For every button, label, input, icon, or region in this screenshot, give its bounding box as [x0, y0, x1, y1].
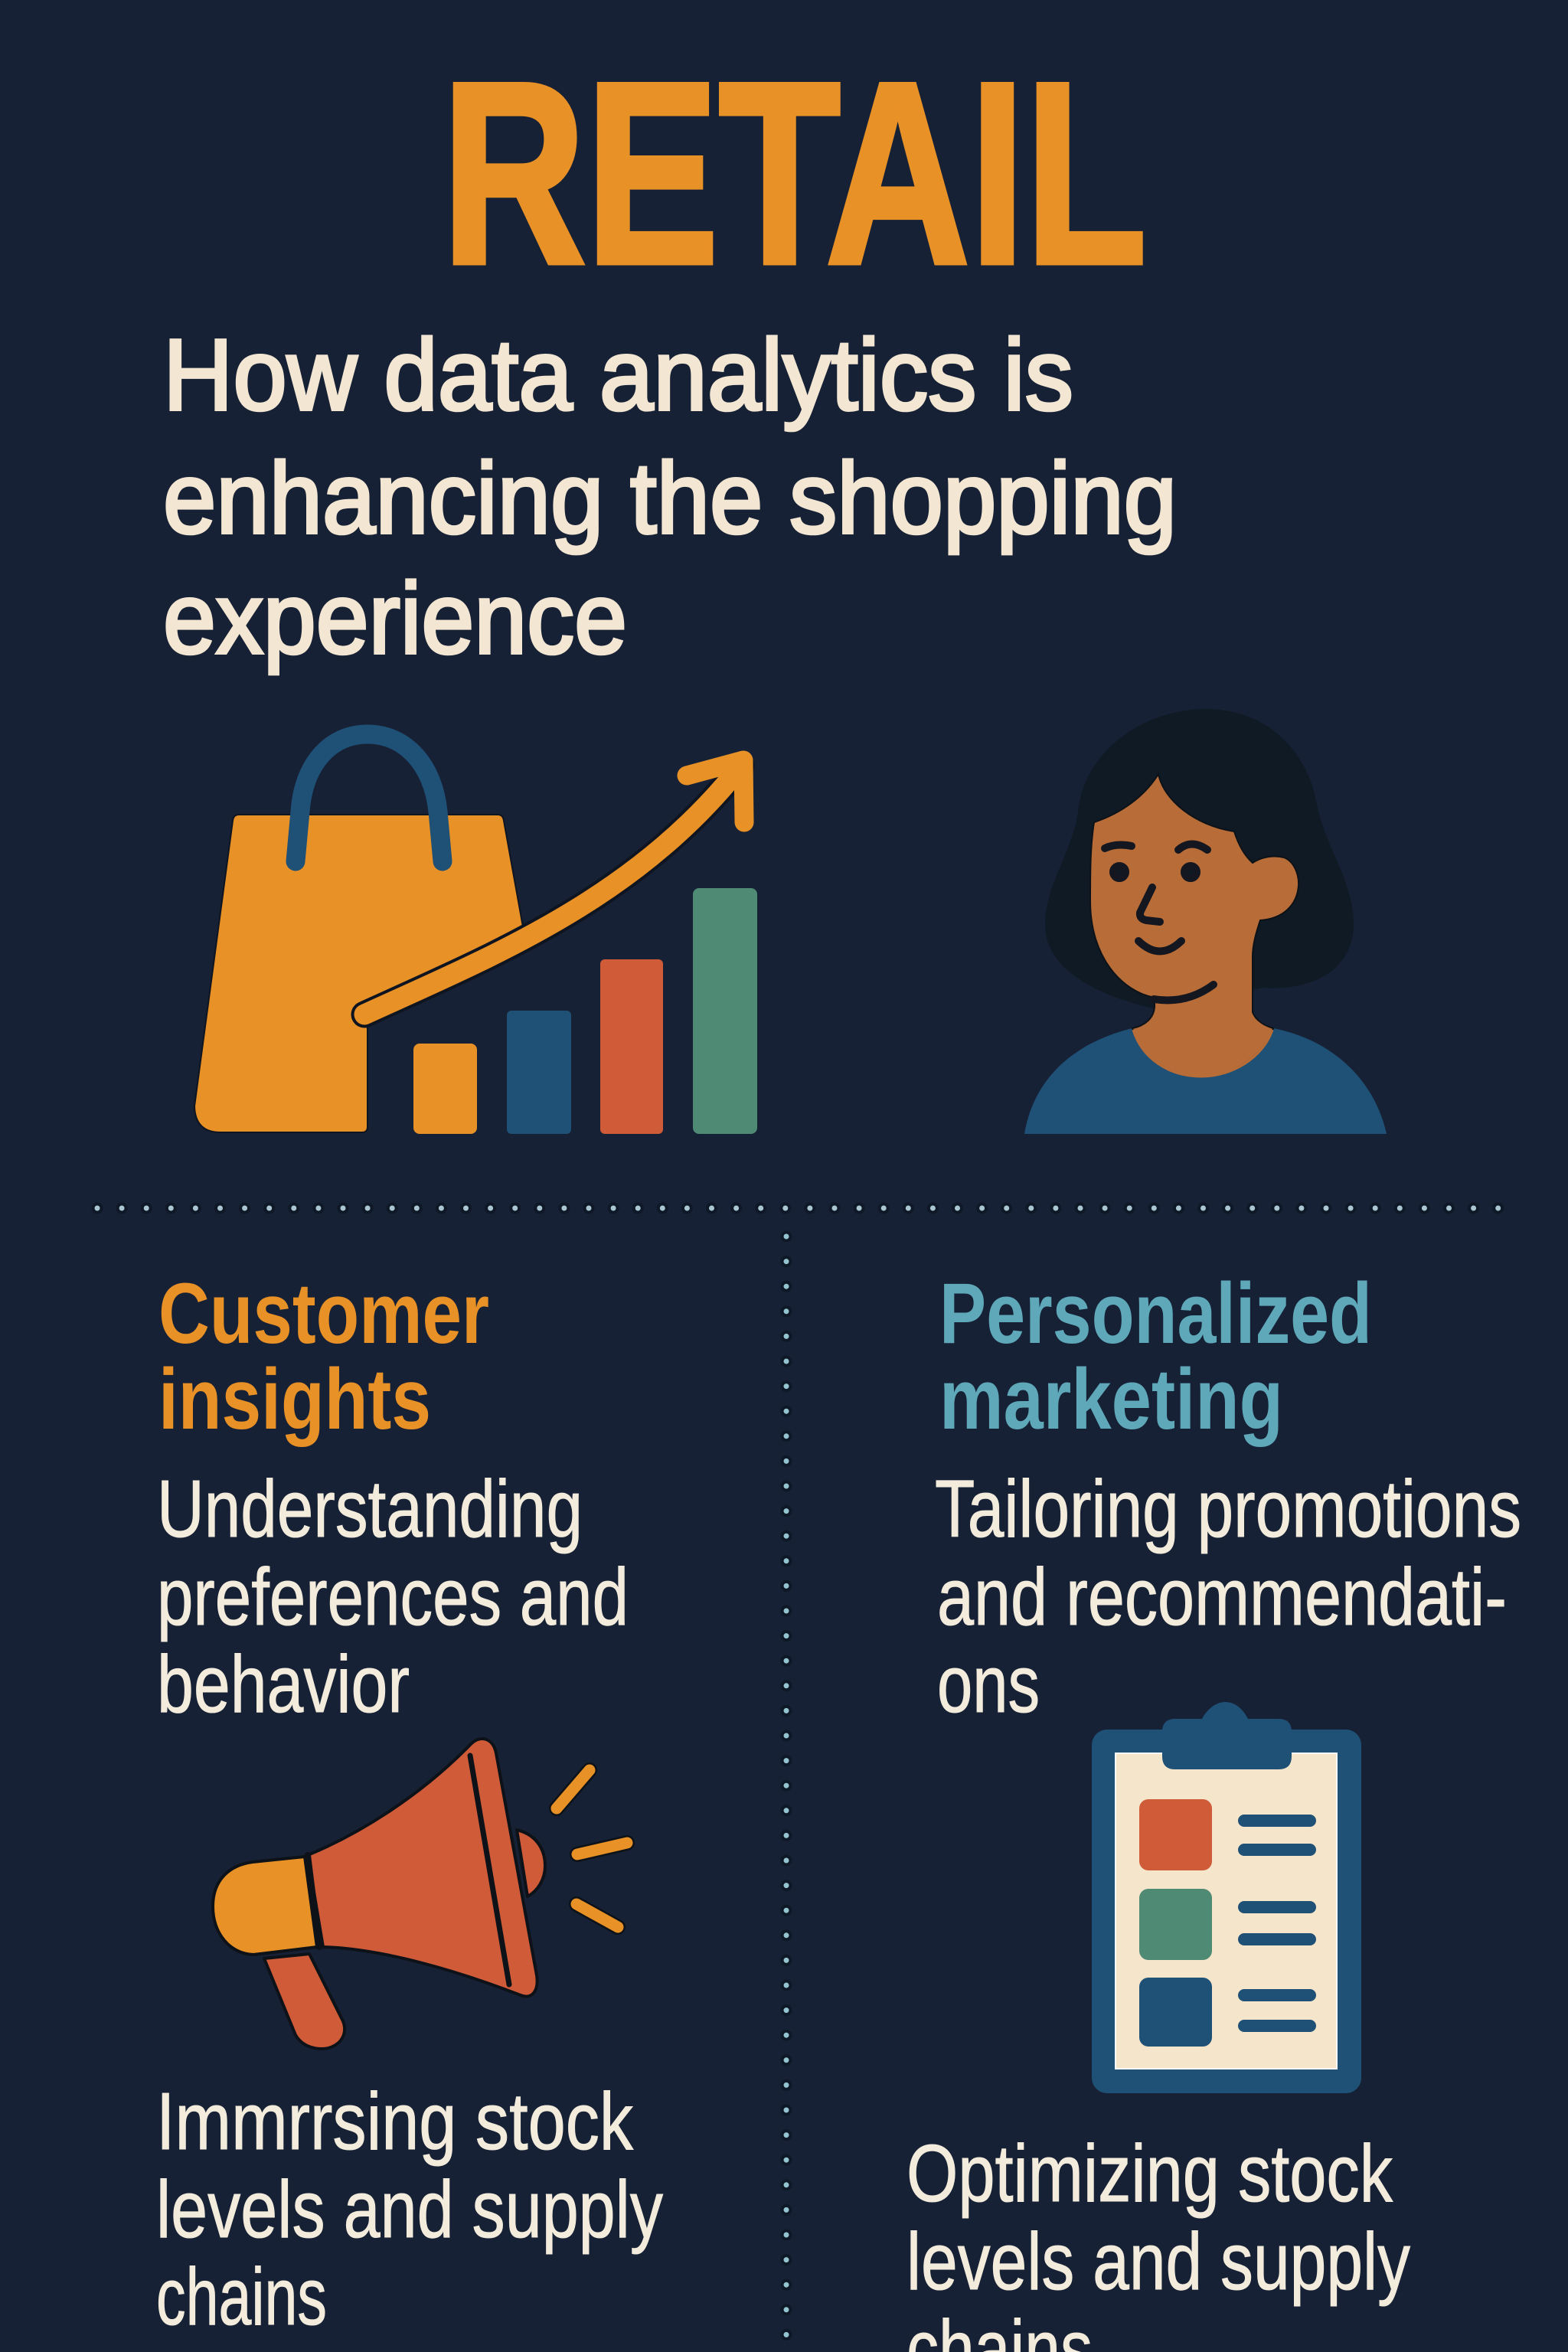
hair	[1045, 709, 1354, 1009]
heading: customer insights: insights	[158, 1351, 431, 1447]
megaphone cone	[308, 1739, 537, 1997]
text: stock levels left: levels and supply	[156, 2164, 663, 2255]
vertical dotted divider	[781, 1236, 792, 2352]
text: stock levels right	[906, 2128, 1410, 2352]
subtitle: enhancing the shopping	[163, 442, 1177, 554]
facial features	[1105, 844, 1214, 1000]
sound rays	[557, 1770, 627, 1927]
clipboard board	[1092, 1730, 1361, 2093]
subtitle	[163, 318, 1177, 675]
icon: clipboard	[1092, 1702, 1361, 2093]
text: stock levels left: chains	[156, 2252, 327, 2342]
text: customer insights description: behavior	[157, 1639, 410, 1730]
subtitle: How data analytics is	[163, 318, 1073, 431]
neckline	[1133, 1030, 1272, 1076]
heading: customer insights: Customer	[158, 1266, 489, 1361]
text: personalized marketing description	[935, 1464, 1521, 1730]
heading: personalized marketing: Personalized	[939, 1266, 1372, 1361]
growth arrow	[364, 760, 744, 1014]
text: customer insights description	[157, 1464, 629, 1730]
heading: personalized marketing: marketing	[939, 1351, 1283, 1447]
heading: personalized marketing	[939, 1266, 1372, 1447]
megaphone lines	[308, 1855, 319, 1947]
clip	[1162, 1702, 1292, 1769]
text: stock levels right: Optimizing stock	[906, 2128, 1393, 2219]
icon: woman portrait	[1024, 709, 1387, 1134]
text: customer insights description: preferences and	[157, 1552, 629, 1642]
icon: megaphone	[213, 1739, 627, 2049]
list lines	[1238, 1815, 1316, 2032]
text: customer insights description: Understanding	[157, 1464, 583, 1554]
text: stock levels left: Immrrsing stock	[156, 2076, 634, 2167]
shirt	[1024, 1028, 1387, 1134]
megaphone back cap	[517, 1830, 545, 1896]
megaphone handle	[264, 1954, 345, 2049]
paper	[1116, 1753, 1337, 2069]
text: personalized marketing description: ons	[937, 1639, 1040, 1730]
face and neck	[1090, 774, 1298, 1076]
bag handle	[296, 734, 443, 861]
heading: customer insights	[158, 1266, 489, 1447]
text: stock levels right: levels and supply	[906, 2216, 1410, 2307]
horizontal dotted divider	[97, 1202, 1498, 1214]
icon: shopping bag with growth chart	[194, 734, 757, 1134]
bar chart	[413, 888, 757, 1134]
text: stock levels left	[156, 2076, 663, 2342]
title: RETAIL	[442, 28, 1147, 318]
megaphone grip	[213, 1857, 317, 1955]
list squares	[1139, 1799, 1212, 2047]
subtitle: experience	[163, 562, 627, 675]
bag body	[194, 815, 524, 1132]
